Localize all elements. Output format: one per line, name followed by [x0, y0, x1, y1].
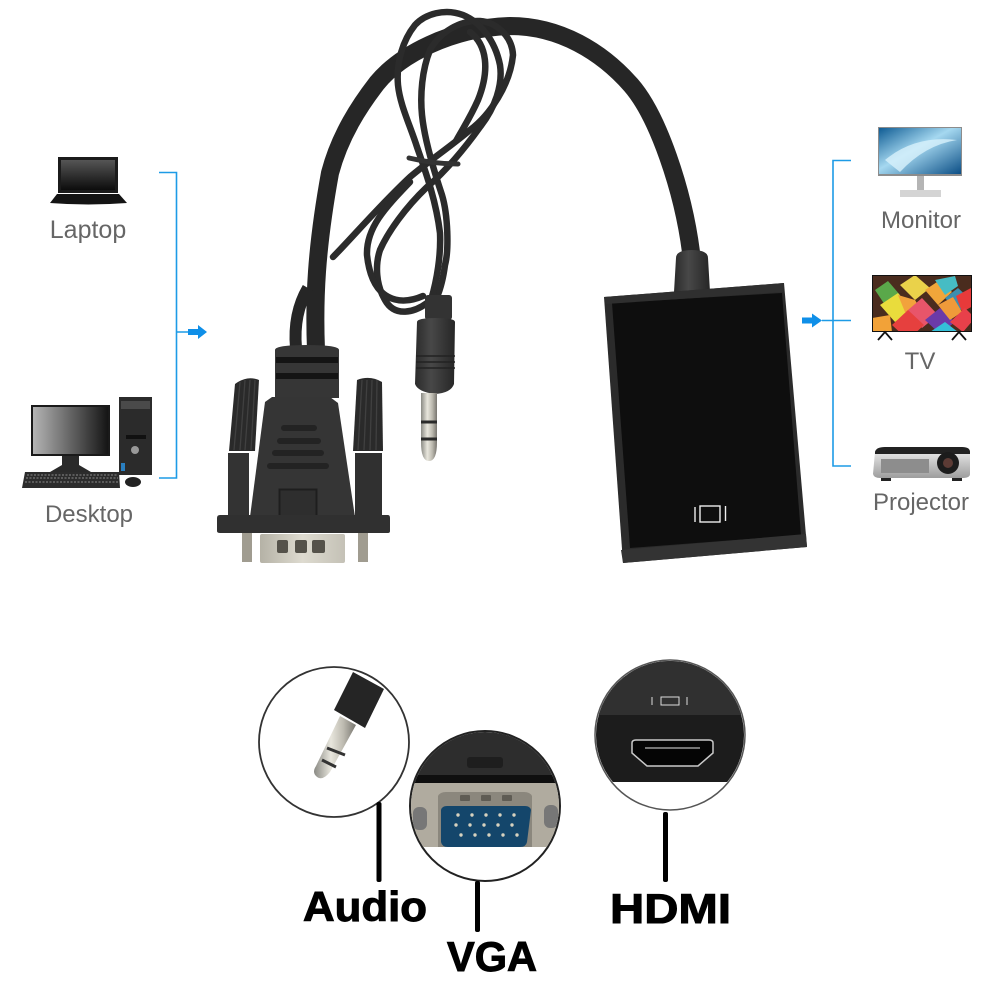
icon: projector [873, 447, 970, 481]
label: VGA: VGA [447, 933, 537, 980]
detail: audio jack circle [259, 667, 409, 817]
label: Desktop: Desktop [45, 501, 133, 528]
cable tie [409, 158, 458, 164]
label: HDMI: HDMI [610, 885, 731, 932]
detail: HDMI port circle [590, 655, 750, 810]
VGA connector [217, 345, 390, 563]
label: Laptop: Laptop [50, 216, 126, 244]
icon: HDMI logo [695, 506, 726, 522]
adapter box [604, 283, 807, 563]
right device group: displays [872, 127, 975, 516]
audio jack [415, 295, 455, 461]
thin audio cables [333, 12, 513, 312]
label: Projector: Projector [873, 489, 969, 516]
product: VGA to HDMI adapter [217, 12, 807, 563]
right bracket connector with arrow [802, 160, 851, 466]
leader line: HDMI [663, 812, 668, 882]
left bracket connector with arrow [159, 172, 207, 478]
icon: desktop computer [22, 397, 152, 488]
cable collar [674, 250, 710, 292]
icon: TV [872, 275, 975, 340]
leader line: audio [376, 802, 382, 882]
label: TV: TV [905, 348, 935, 375]
label: Audio: Audio [303, 883, 427, 930]
leader line: VGA [475, 881, 480, 932]
label: Monitor: Monitor [881, 207, 961, 234]
icon: monitor [878, 127, 962, 197]
icon: laptop [50, 157, 127, 204]
left device group: sources [22, 157, 152, 528]
detail: VGA port circle [405, 730, 565, 881]
main cable [296, 26, 691, 350]
